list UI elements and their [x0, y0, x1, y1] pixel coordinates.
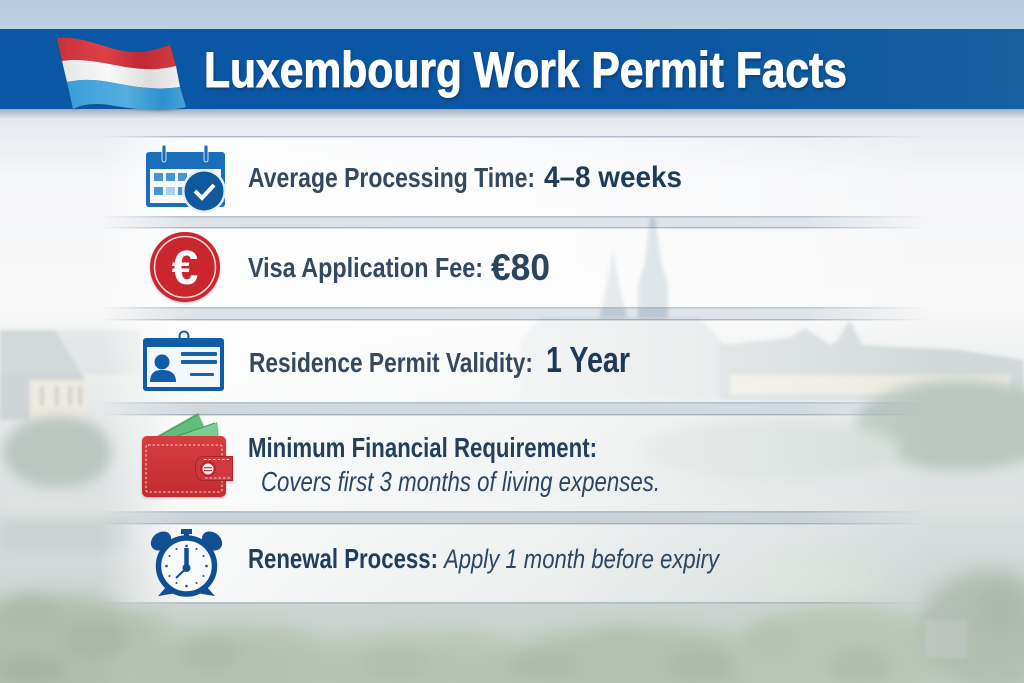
panel: renewal process row — [100, 523, 930, 604]
label: renewal process: Renewal Process: — [248, 543, 438, 574]
title: Luxembourg Work Permit Facts — [204, 42, 847, 98]
label: visa fee: Visa Application Fee: — [248, 252, 483, 283]
value: visa fee: €80 — [491, 247, 550, 288]
top banner — [0, 29, 1024, 119]
panel: visa fee row — [100, 227, 930, 320]
icon: alarm clock — [147, 528, 226, 595]
detail: renewal process: Apply 1 month before expiry — [442, 544, 720, 574]
icon: calendar with check — [146, 145, 226, 213]
icon: euro coin: € — [172, 242, 198, 295]
value: residence permit: 1 Year — [546, 339, 630, 380]
value: processing time: 4–8 weeks — [544, 161, 682, 194]
label: financial requirement: Minimum Financial Requirement: — [248, 432, 597, 463]
panel: residence permit row — [100, 319, 930, 415]
icon: euro coin — [150, 232, 220, 302]
icon: red wallet with cash — [142, 413, 233, 497]
label: processing time: Average Processing Time: — [248, 162, 535, 193]
panel: processing time row — [100, 136, 930, 228]
panel: financial requirement row — [100, 413, 930, 524]
label: residence permit: Residence Permit Validity: — [249, 347, 533, 378]
detail: financial requirement: Covers first 3 months of living expenses. — [261, 466, 660, 497]
icon: Luxembourg flag — [57, 38, 186, 110]
icon: ID badge — [143, 332, 224, 391]
